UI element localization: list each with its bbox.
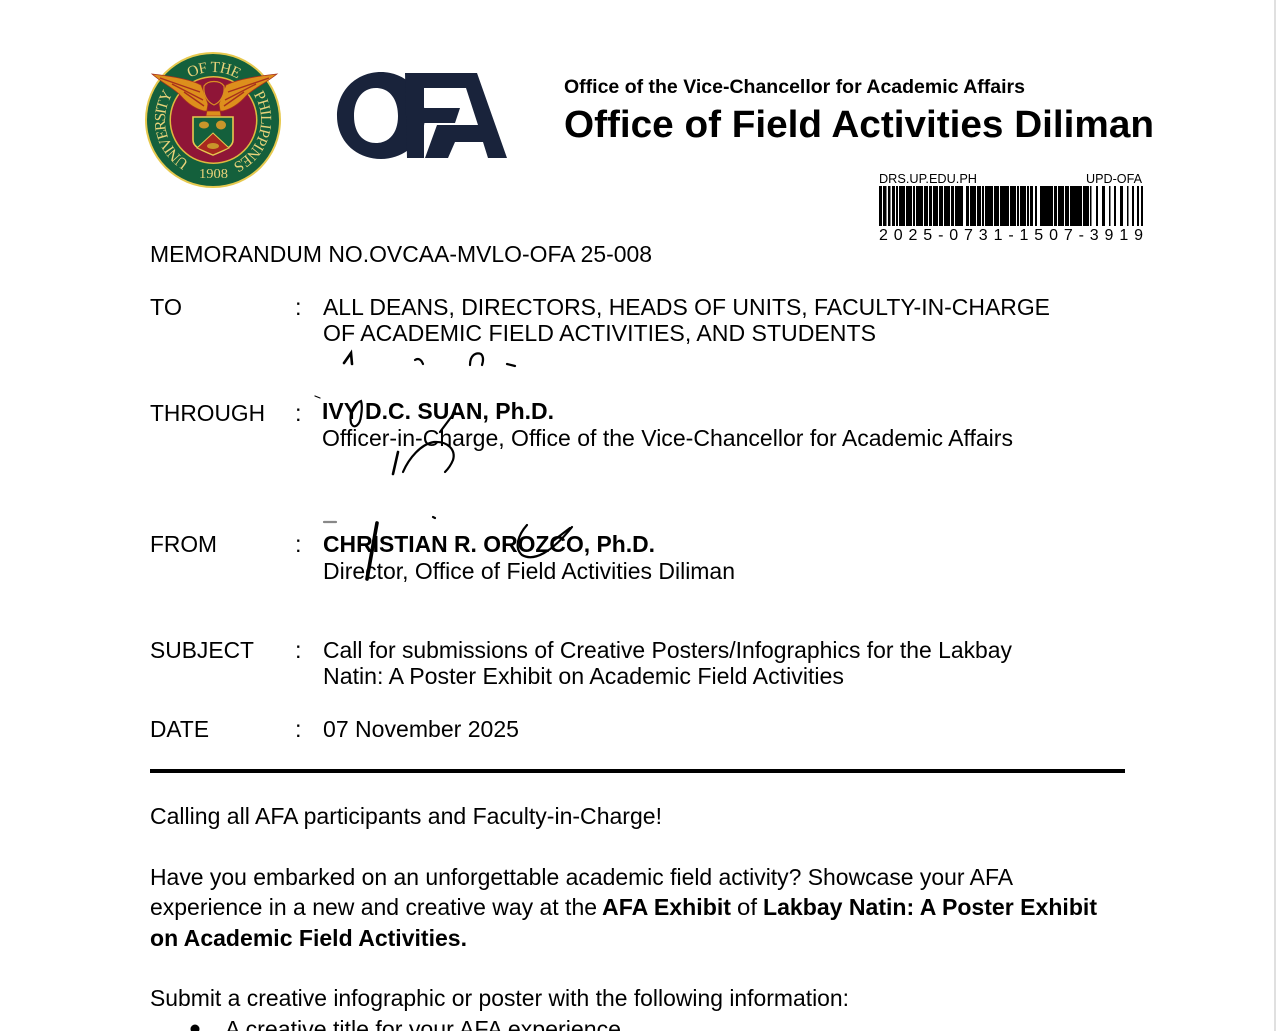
memo field: subject: : [295, 637, 302, 663]
memo field: through: IVY D.C. SUAN, Ph.D. [322, 398, 554, 424]
body: invitation paragraph: Have you embarked on an unforgettable academic field activity? Showcase your AFA [150, 864, 1013, 890]
memo field: from: : [295, 531, 302, 557]
header: office names: Office of Field Activities Diliman [564, 104, 1154, 146]
memorandum number: MEMORANDUM NO.OVCAA-MVLO-OFA 25-008 [150, 241, 652, 267]
barcode: UPD-OFA [1086, 172, 1143, 186]
body: invitation paragraph: on Academic Field Activities. [150, 925, 467, 951]
signature: top fragment [344, 353, 515, 366]
barcode: 2025-0731-1507-3919 [879, 227, 1143, 244]
memo field: to: TO [150, 294, 182, 320]
memo field: date: DATE [150, 716, 209, 742]
memo field: subject: Call for submissions of Creative Posters/Infographics for the Lakbay [323, 637, 1012, 663]
icon: University of the Philippines seal [145, 52, 281, 188]
icon: OFA logo [337, 72, 507, 159]
body: invitation paragraph: AFA Exhibit [602, 894, 731, 920]
memo field: to [150, 294, 1050, 346]
memo field: date: : [295, 716, 302, 742]
memo field: subject: SUBJECT [150, 637, 254, 663]
memo field: through: Officer-in-Charge, Office of the Vice-Chancellor for Academic Affairs [322, 425, 1013, 451]
memo field: through: : [295, 400, 302, 426]
icon: University of the Philippines seal: OF THE [188, 62, 241, 78]
memo field: from: CHRISTIAN R. OROZCO, Ph.D. [323, 531, 655, 557]
header: office names: Office of the Vice-Chancellor for Academic Affairs [564, 76, 1025, 98]
barcode [879, 172, 1143, 244]
body: invitation paragraph: experience in a new and creative way at the [150, 894, 597, 920]
signature: Orozco [324, 517, 572, 579]
memo field: from [150, 531, 735, 584]
memo field: date: 07 November 2025 [323, 716, 519, 742]
body: submission instructions [150, 985, 849, 1031]
memo field: to: : [295, 294, 302, 320]
memo field: through [150, 398, 1013, 451]
memo field: to: OF ACADEMIC FIELD ACTIVITIES, AND STUDENTS [323, 320, 876, 346]
memo field: through: THROUGH [150, 400, 265, 426]
icon: University of the Philippines seal: 1908 [199, 167, 228, 182]
header: office names [564, 76, 1154, 146]
memo field: date [150, 716, 519, 742]
icon: University of the Philippines seal: PHILIPPINES [234, 90, 272, 172]
memo field: from: FROM [150, 531, 217, 557]
memo field: from: Director, Office of Field Activities Diliman [323, 558, 735, 584]
memo field: to: ALL DEANS, DIRECTORS, HEADS OF UNITS, FACULTY-IN-CHARGE [323, 294, 1050, 320]
signature: Suan [315, 396, 455, 474]
memo field: subject [150, 637, 1012, 689]
body: invitation paragraph: of [737, 894, 757, 920]
body: invitation paragraph: Lakbay Natin: A Poster Exhibit [763, 894, 1097, 920]
barcode: DRS.UP.EDU.PH [879, 172, 977, 186]
icon: University of the Philippines seal: UNIVERSITY [154, 89, 186, 170]
body: greeting: Calling all AFA participants and Faculty-in-Charge! [150, 803, 662, 829]
memo field: subject: Natin: A Poster Exhibit on Academic Field Activities [323, 663, 844, 689]
body: submission instructions: Submit a creative infographic or poster with the following information: [150, 985, 849, 1011]
body: invitation paragraph [150, 864, 1097, 951]
